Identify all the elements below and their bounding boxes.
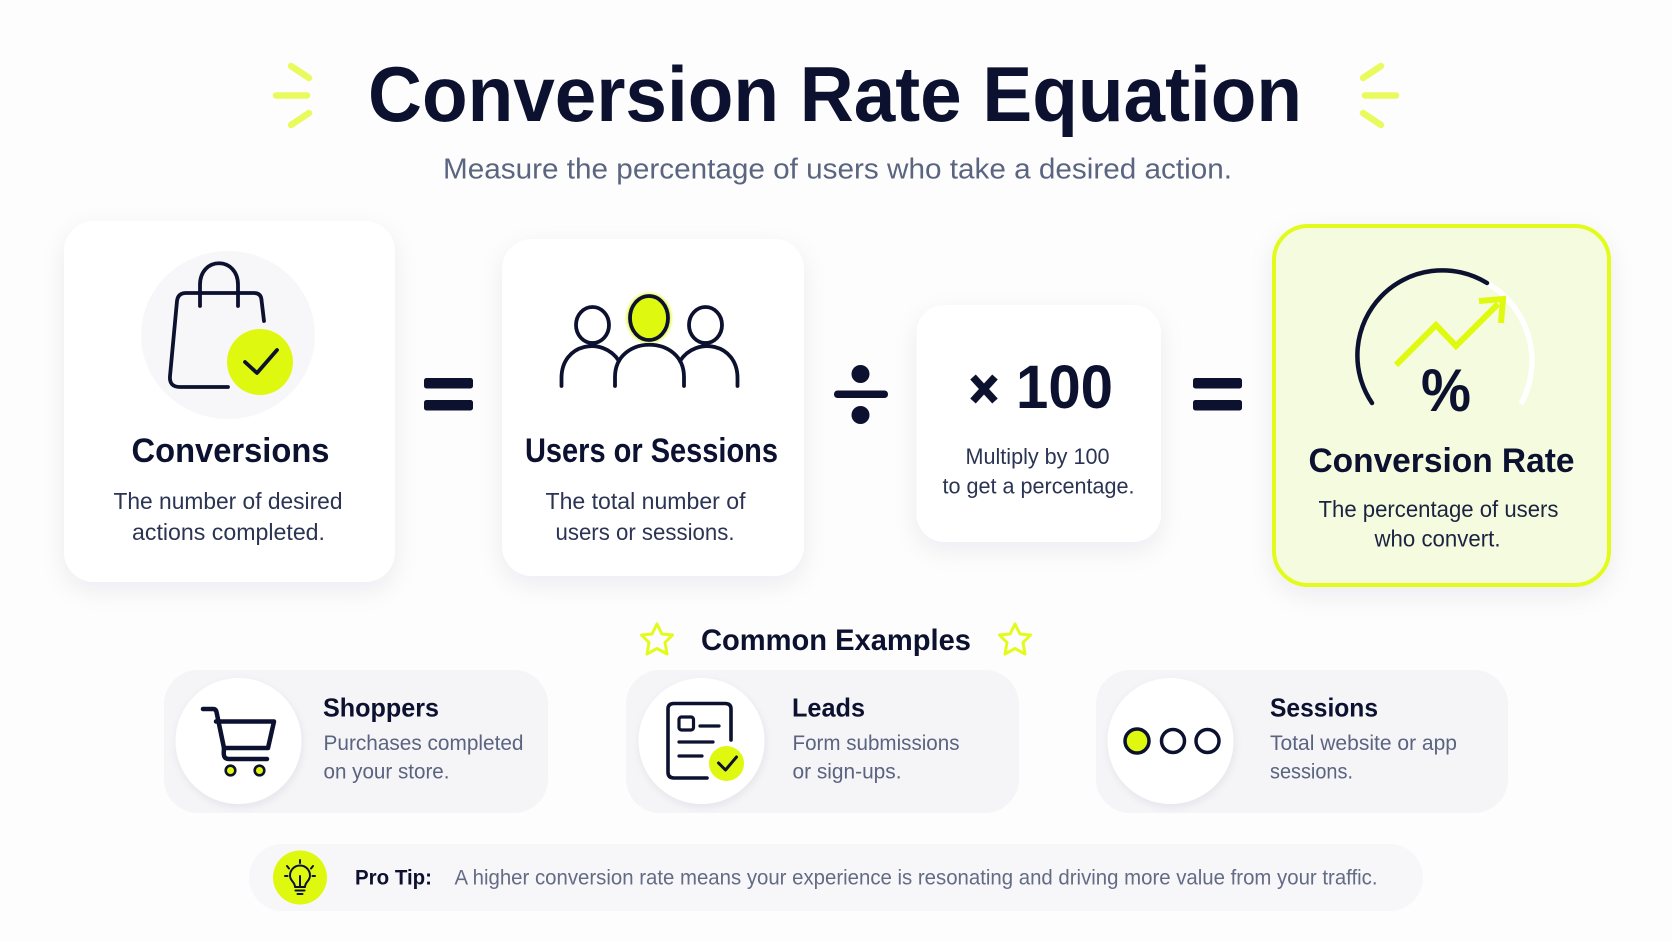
heading text: Common Examples (701, 624, 971, 657)
label: Pro Tip: (355, 866, 432, 890)
description (1318, 496, 1558, 552)
description: users or sessions. (556, 519, 734, 545)
tip text: A higher conversion rate means your experience is resonating and driving more value from your traffic. (454, 866, 1378, 890)
operator: divide (834, 365, 888, 424)
text (792, 692, 960, 784)
description: The number of desired (114, 488, 342, 514)
heading: Conversions (132, 432, 330, 470)
section heading: common examples (642, 624, 1030, 657)
icon: gauge with rising arrow (1357, 270, 1532, 424)
text: sessions. (1270, 760, 1353, 784)
text: Leads (792, 692, 865, 722)
text: Sessions (1270, 692, 1378, 722)
text: Shoppers (323, 692, 439, 722)
panel: conversions (64, 221, 395, 582)
title: Conversion Rate Equation (368, 50, 1302, 138)
subtitle: Measure the percentage of users who take a desired action. (443, 154, 1232, 186)
text: on your store. (324, 760, 450, 784)
callout: pro tip (249, 844, 1423, 911)
icon: form with check (638, 678, 764, 804)
multiplier value (973, 353, 1113, 421)
text (1270, 692, 1457, 784)
description: The percentage of users (1318, 496, 1558, 522)
description: to get a percentage. (942, 474, 1134, 498)
text: Form submissions (792, 732, 960, 755)
icon: right sparkle rays (1363, 66, 1396, 125)
description: who convert. (1374, 526, 1500, 552)
multiplier value: 100 (1016, 353, 1113, 421)
description: Multiply by 100 (966, 444, 1110, 469)
icon: left sparkle rays (276, 66, 309, 125)
description: actions completed. (132, 519, 325, 545)
panel: multiply by 100 (916, 305, 1161, 542)
panel: leads example (626, 670, 1019, 813)
icon: gauge with rising arrow: % (1421, 357, 1471, 424)
icon: right star (1000, 624, 1030, 654)
description (942, 444, 1134, 498)
icon: shopping bag with check (141, 251, 315, 419)
operator: equals (1193, 378, 1242, 410)
icon: three session dots (1108, 678, 1234, 804)
heading: Conversion Rate (1308, 442, 1574, 480)
text: Total website or app (1270, 732, 1457, 755)
icon: group of people (562, 294, 738, 386)
panel: shoppers example (164, 670, 548, 813)
text: Purchases completed (324, 732, 524, 755)
text (323, 692, 524, 784)
description (114, 488, 342, 545)
text: or sign-ups. (792, 760, 902, 784)
description (546, 488, 746, 545)
header (276, 50, 1396, 186)
icon: shopping cart (176, 678, 302, 804)
panel: conversion rate result (1274, 226, 1609, 585)
heading: Users or Sessions (525, 432, 778, 470)
icon: light bulb (273, 850, 327, 904)
icon: left star (642, 624, 672, 654)
panel: sessions example (1096, 670, 1508, 813)
description: The total number of (546, 488, 746, 514)
operator: equals (424, 378, 473, 410)
panel: users or sessions (502, 239, 804, 576)
